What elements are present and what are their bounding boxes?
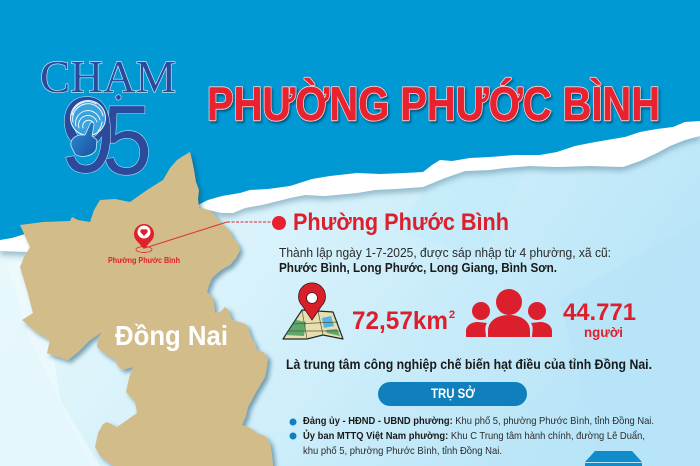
province label: Đồng Nai (115, 320, 228, 351)
torn paper edge (0, 121, 700, 252)
list: headquarters addresses (290, 415, 654, 457)
dashed connector (227, 221, 272, 223)
stat: area superscript: 2 (449, 309, 455, 321)
text block: founding (279, 245, 611, 275)
logo wordmark: CHẠM (40, 51, 176, 102)
background: pale lower panel (0, 125, 700, 466)
list: headquarters addresses: khu phố 5, phường Phước Bình, tỉnh Đồng Nai. (303, 445, 502, 457)
stat: area: 72,57km (352, 307, 448, 335)
icon: people (466, 289, 552, 337)
icon: pointing hand (71, 122, 97, 156)
map: Đồng Nai province (20, 152, 273, 466)
badge: Trụ sở (378, 382, 527, 406)
stat: population: 44.771 (563, 299, 636, 326)
connector line (145, 222, 227, 248)
icon: map with pin (283, 283, 343, 339)
logo numeral 9: 9 (60, 74, 115, 195)
logo numeral 5: 5 (102, 85, 152, 195)
icon: location pin (134, 224, 154, 252)
text block: founding: Phước Bình, Long Phước, Long Giang, Bình Sơn. (279, 260, 557, 275)
list: headquarters addresses: Ủy ban MTTQ Việt Nam phường: Khu C Trung tâm hành chính, đường Lê Duẩn, (303, 429, 645, 442)
text block: founding: Thành lập ngày 1-7-2025, được sáp nhập từ 4 phường, xã cũ: (279, 245, 611, 260)
icon: fingerprint (70, 100, 106, 136)
stat: population: người (584, 324, 623, 340)
text block: cashew centre: Là trung tâm công nghiệp chế biến hạt điều của tỉnh Đồng Nai. (286, 357, 652, 372)
badge: Trụ sở: TRỤ SỞ (431, 384, 475, 401)
heading: Phường Phước Bình: Phường Phước Bình (293, 209, 509, 236)
stat: population (563, 299, 636, 340)
map shape (20, 152, 273, 466)
list: headquarters addresses: Đảng ủy - HĐND - UBND phường: Khu phố 5, phường Phước Bình, tỉnh Đồng Nai. (303, 415, 654, 427)
logo: Chạm 95 (40, 51, 176, 195)
pin label: Phường Phước Bình (108, 256, 180, 265)
icon: building roof (585, 451, 642, 466)
